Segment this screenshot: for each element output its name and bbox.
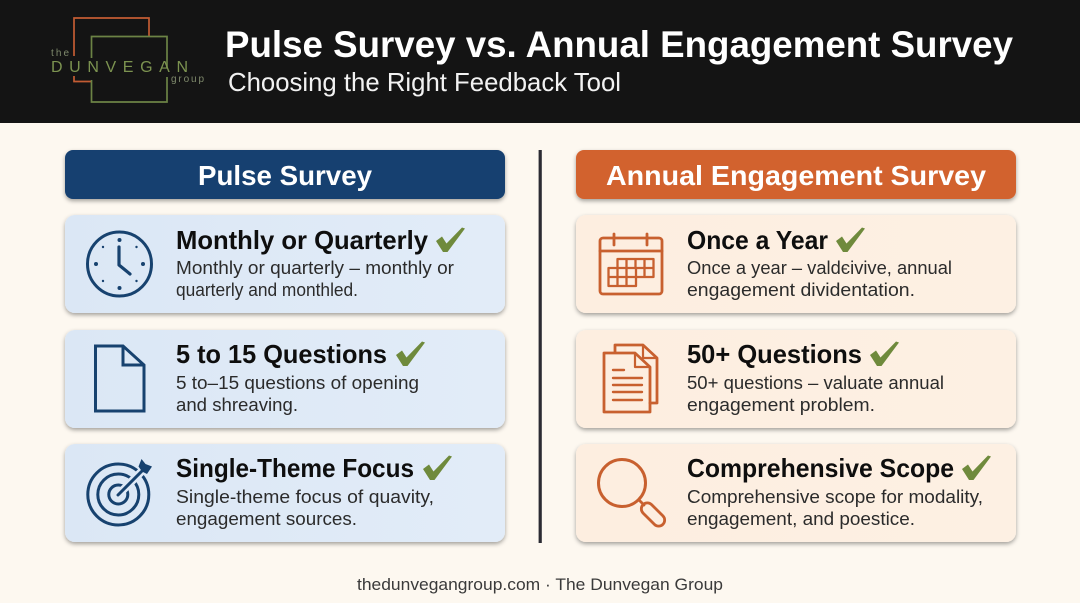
icon: clock xyxy=(88,232,152,296)
card text: engagement, and poestice. xyxy=(687,508,915,529)
icon: check xyxy=(870,342,899,366)
logo: DUNVEGAN xyxy=(51,59,188,76)
icon: magnifier xyxy=(598,460,667,529)
heading: pulse survey xyxy=(65,150,505,199)
subtitle: Choosing the Right Feedback Tool xyxy=(228,67,621,97)
icon: documents xyxy=(604,345,657,412)
card text xyxy=(176,486,434,529)
icon: check xyxy=(423,456,452,480)
heading: pulse survey: Pulse Survey xyxy=(198,160,372,191)
card title: 5 to 15 Questions xyxy=(176,339,387,369)
card: single-theme focus xyxy=(65,444,505,542)
card: monthly or quarterly xyxy=(65,215,505,313)
card text: Single-theme focus of quavity, xyxy=(176,486,434,507)
card text: and shreaving. xyxy=(176,394,298,415)
card text: engagement sources. xyxy=(176,508,357,529)
card text: engagement dividentation. xyxy=(687,279,915,300)
card text: Once a year – valdєivive, annual xyxy=(687,257,952,278)
card: comprehensive scope xyxy=(576,444,1016,542)
card title: Monthly or Quarterly xyxy=(176,225,429,255)
icon: check xyxy=(436,228,465,252)
card title: 50+ Questions xyxy=(687,339,862,369)
icon: document xyxy=(96,346,144,411)
card title: Once a Year xyxy=(687,225,828,255)
heading: annual engagement survey: Annual Engagement Survey xyxy=(606,160,986,191)
heading: annual engagement survey xyxy=(576,150,1016,199)
card title: Single-Theme Focus xyxy=(176,453,414,483)
icon: target xyxy=(88,459,152,525)
column divider xyxy=(539,150,542,543)
title: Pulse Survey vs. Annual Engagement Survey xyxy=(225,24,1013,65)
card text xyxy=(687,257,952,300)
panel: pulse survey xyxy=(65,150,505,542)
icon: check xyxy=(836,228,865,252)
logo: the xyxy=(51,48,69,59)
card: once a year xyxy=(576,215,1016,313)
card text: quarterly and monthled. xyxy=(176,279,358,300)
icon: check xyxy=(962,456,991,480)
card text xyxy=(687,372,944,415)
card text: Comprehensive scope for modality, xyxy=(687,486,983,507)
card: 50+ questions xyxy=(576,330,1016,428)
footer: thedunvegangroup.com · The Dunvegan Group xyxy=(357,575,723,594)
logo: group xyxy=(171,74,204,85)
header band xyxy=(0,0,1080,123)
card text: engagement problem. xyxy=(687,394,875,415)
card title: Comprehensive Scope xyxy=(687,453,954,483)
card text: 50+ questions – valuate annual xyxy=(687,372,944,393)
logo xyxy=(51,18,204,102)
card text xyxy=(176,372,419,415)
icon: check xyxy=(396,342,425,366)
card: 5 to 15 questions xyxy=(65,330,505,428)
panel: annual engagement survey xyxy=(576,150,1016,542)
card text: Monthly or quarterly – monthly or xyxy=(176,257,454,278)
card text xyxy=(176,257,454,300)
card text xyxy=(687,486,983,529)
card text: 5 to–15 questions of opening xyxy=(176,372,419,393)
icon: calendar xyxy=(600,234,662,294)
